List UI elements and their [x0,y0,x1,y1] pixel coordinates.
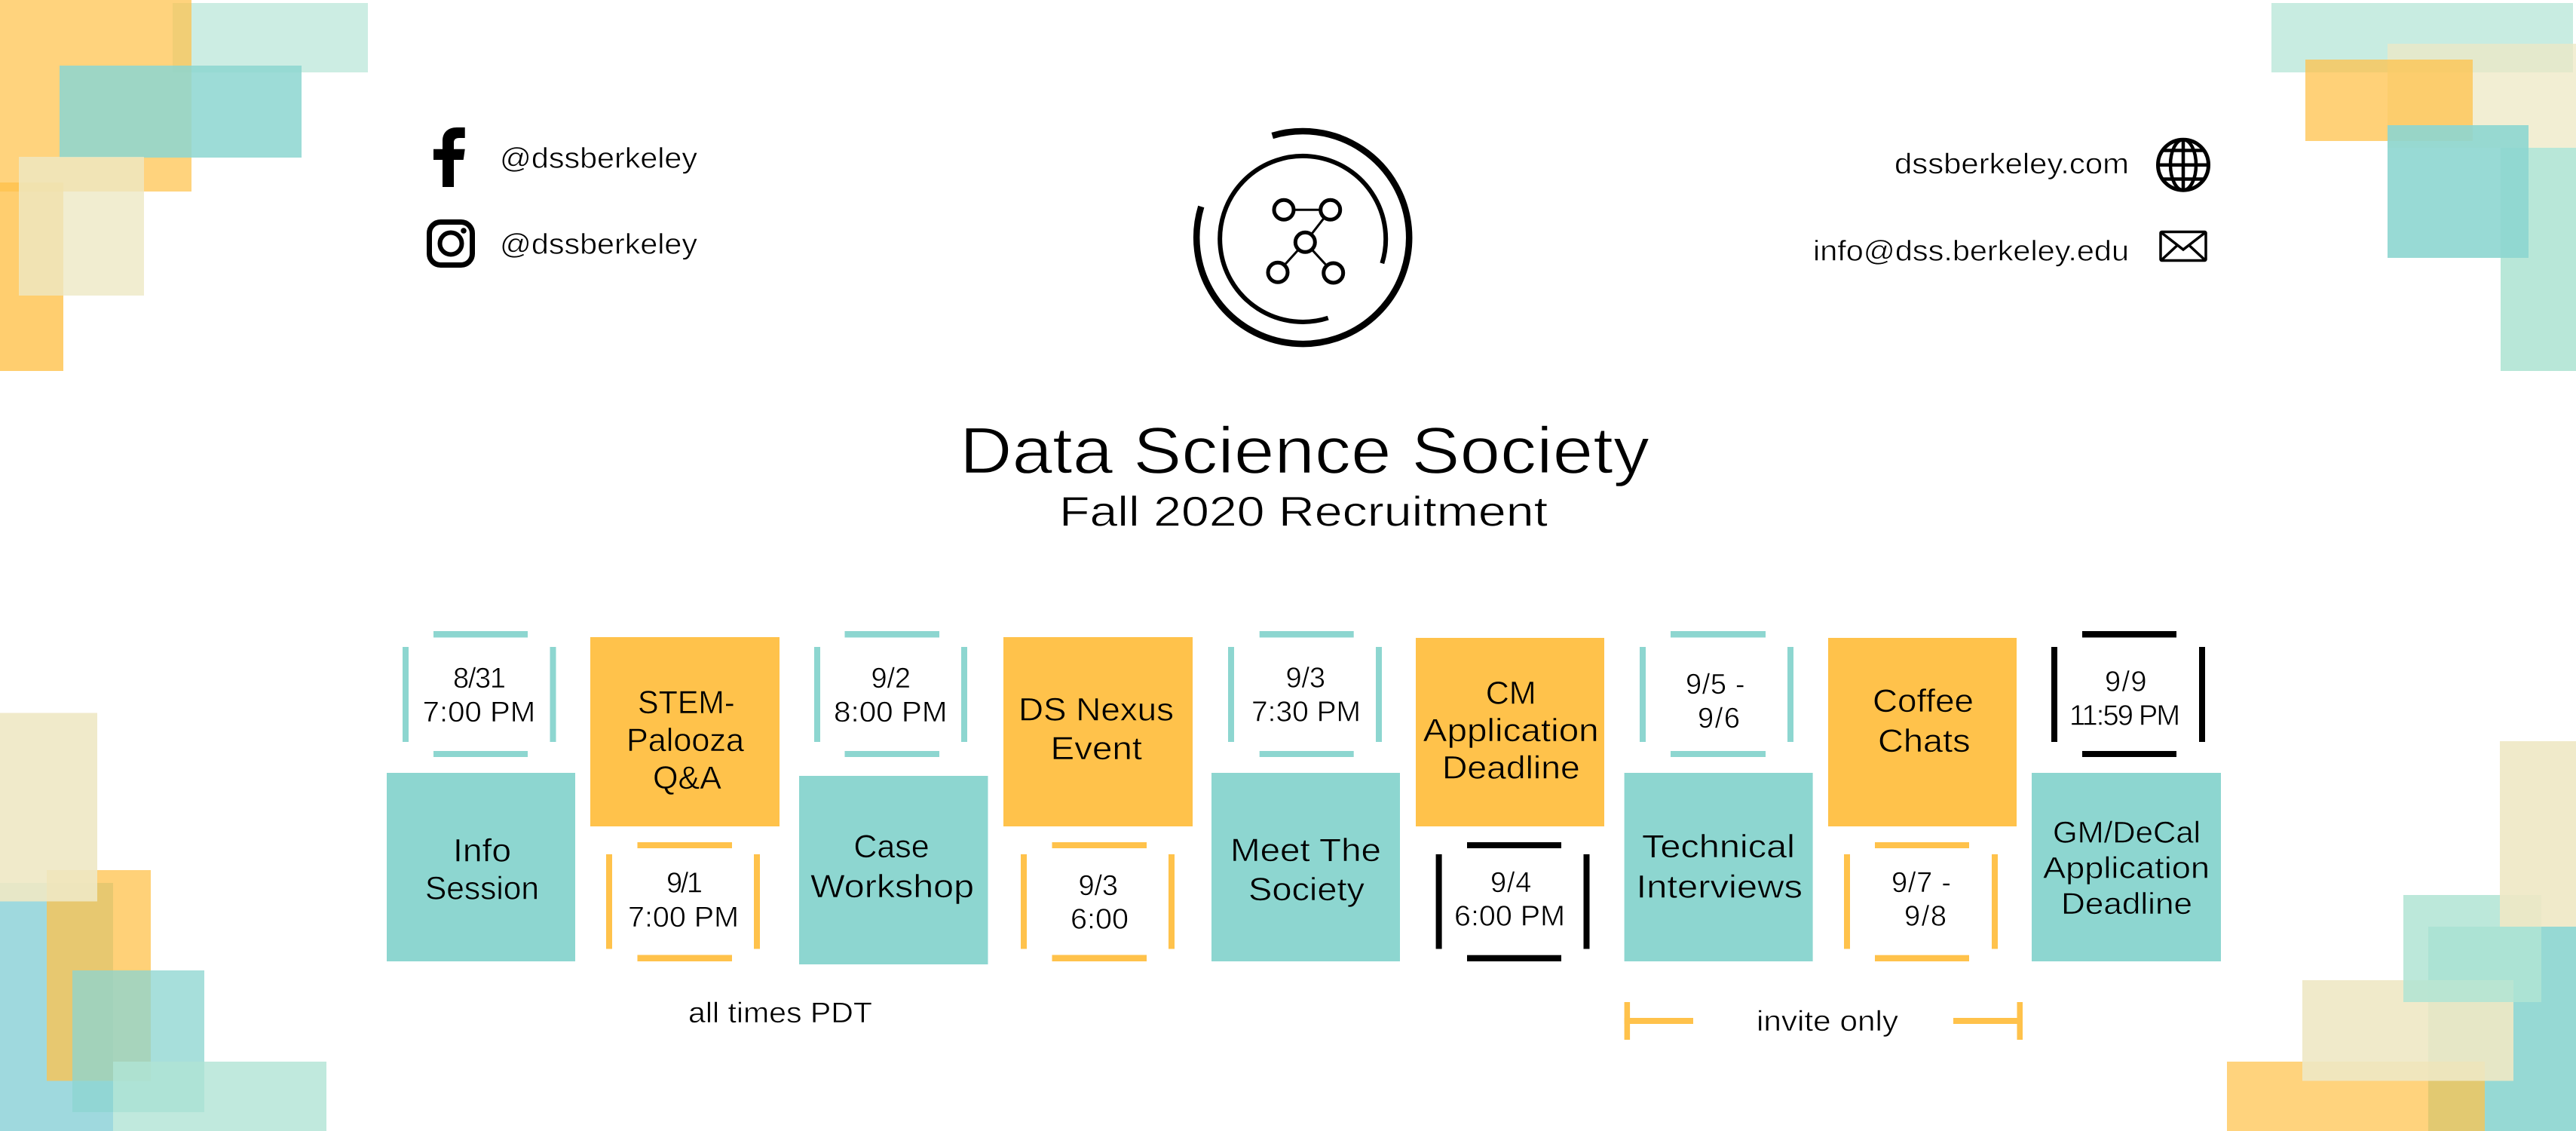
note: all times PDT: all times PDT [688,998,872,1029]
event card: STEM-Palooza Q&A: Q&A [653,760,721,796]
date box: 9/2 8:00 PM: 8:00 PM [834,697,947,728]
event card: Info Session: Info [453,833,511,869]
event card: GM/DeCal Application Deadline [2032,773,2221,961]
date box: 9/7 - 9/8: 9/8 [1904,901,1947,933]
event card: Meet The Society: Society [1248,872,1365,908]
date box: 9/4 6:00 PM [1436,842,1589,961]
event card: CM Application Deadline [1416,638,1604,826]
date box: 9/3 7:30 PM: 9/3 [1286,663,1325,694]
date box: 9/1 7:00 PM: 7:00 PM [628,902,739,933]
event card: Info Session: Session [425,870,539,906]
date box: 9/7 - 9/8 [1844,842,1998,961]
text: email: info@dss.berkeley.edu [1813,236,2129,268]
event card: GM/DeCal Application Deadline: Deadline [2061,887,2192,921]
event card: CM Application Deadline: Application [1423,713,1599,749]
text: website: dssberkeley.com [1894,149,2129,180]
event card: STEM-Palooza Q&A: Palooza [626,722,744,759]
date box: 9/3 6:00: 9/3 [1078,870,1118,902]
decoration: bottom-right colour blocks [2227,741,2576,1131]
event card: DS Nexus Event [1003,637,1193,826]
date box: 9/1 7:00 PM: 9/1 [666,868,703,900]
event card: Meet The Society [1211,773,1400,961]
date box: 9/9 11:59 PM [2051,631,2205,757]
icon: globe [2158,139,2209,190]
contact: website [1894,139,2209,190]
date box: 8/31 7:00 PM: 7:00 PM [423,697,535,728]
date box: 9/3 7:30 PM [1228,631,1382,757]
subtitle: Fall 2020 Recruitment [1059,488,1548,535]
event card: Technical Interviews: Technical [1642,829,1795,865]
decoration: top-right colour blocks [2271,3,2576,371]
bracket: invite only: invite only [1757,1006,1898,1038]
date box: 9/4 6:00 PM: 9/4 [1490,867,1531,899]
event card: CM Application Deadline: CM [1486,675,1536,711]
decoration: bottom-left colour blocks [0,713,326,1131]
date box: 9/9 11:59 PM: 11:59 PM [2069,700,2180,732]
event card: Coffee Chats: Chats [1878,723,1971,759]
date box: 9/2 8:00 PM [814,631,967,757]
date box: 8/31 7:00 PM [403,631,556,757]
date box: 9/5 - 9/6 [1640,631,1793,757]
event card: Technical Interviews: Interviews [1636,869,1803,906]
text: facebook handle: @dssberkeley [500,143,697,175]
event card: Case Workshop: Case [853,829,930,865]
date box: 9/3 7:30 PM: 7:30 PM [1251,697,1361,728]
event card: Coffee Chats: Coffee [1873,683,1974,719]
date box: 9/2 8:00 PM: 9/2 [871,663,911,694]
text: instagram handle: @dssberkeley [500,229,697,261]
event card: CM Application Deadline: Deadline [1442,750,1580,786]
date box: 9/1 7:00 PM [606,842,760,961]
icon: facebook [433,127,465,187]
date box: 9/3 6:00: 6:00 [1071,904,1129,936]
event card: Meet The Society: Meet The [1230,832,1381,869]
event card: Info Session [387,773,575,961]
event card: DS Nexus Event: Event [1051,731,1142,767]
date box: 9/9 11:59 PM: 9/9 [2105,667,2147,698]
date box: 9/4 6:00 PM: 6:00 PM [1454,901,1565,933]
date box: 8/31 7:00 PM: 8/31 [453,663,506,694]
date box: 9/3 6:00 [1021,842,1175,961]
date box: 9/5 - 9/6: 9/6 [1698,703,1740,734]
contact: email [1813,232,2206,268]
event card: GM/DeCal Application Deadline: Application [2043,851,2210,884]
event card: Case Workshop [799,776,988,964]
event card: Coffee Chats [1828,638,2017,826]
event card: STEM-Palooza Q&A: STEM- [638,685,735,721]
event card: DS Nexus Event: DS Nexus [1018,691,1174,728]
event card: Case Workshop: Workshop [810,869,974,905]
icon: instagram [430,222,472,265]
social: facebook handle [433,127,697,187]
icon: envelope [2161,232,2206,261]
decoration: top-left colour blocks [0,0,368,371]
event card: STEM-Palooza Q&A [590,637,780,826]
date box: 9/5 - 9/6: 9/5 - [1686,669,1744,700]
logo: data science society [1196,131,1409,344]
bracket: invite only [1625,1002,2023,1040]
social: instagram handle [430,222,697,265]
event card: GM/DeCal Application Deadline: GM/DeCal [2053,817,2201,850]
panel: recruitment timeline [387,631,2221,964]
event card: Technical Interviews [1625,773,1813,961]
date box: 9/7 - 9/8: 9/7 - [1891,867,1951,899]
title: Data Science Society [960,415,1650,488]
